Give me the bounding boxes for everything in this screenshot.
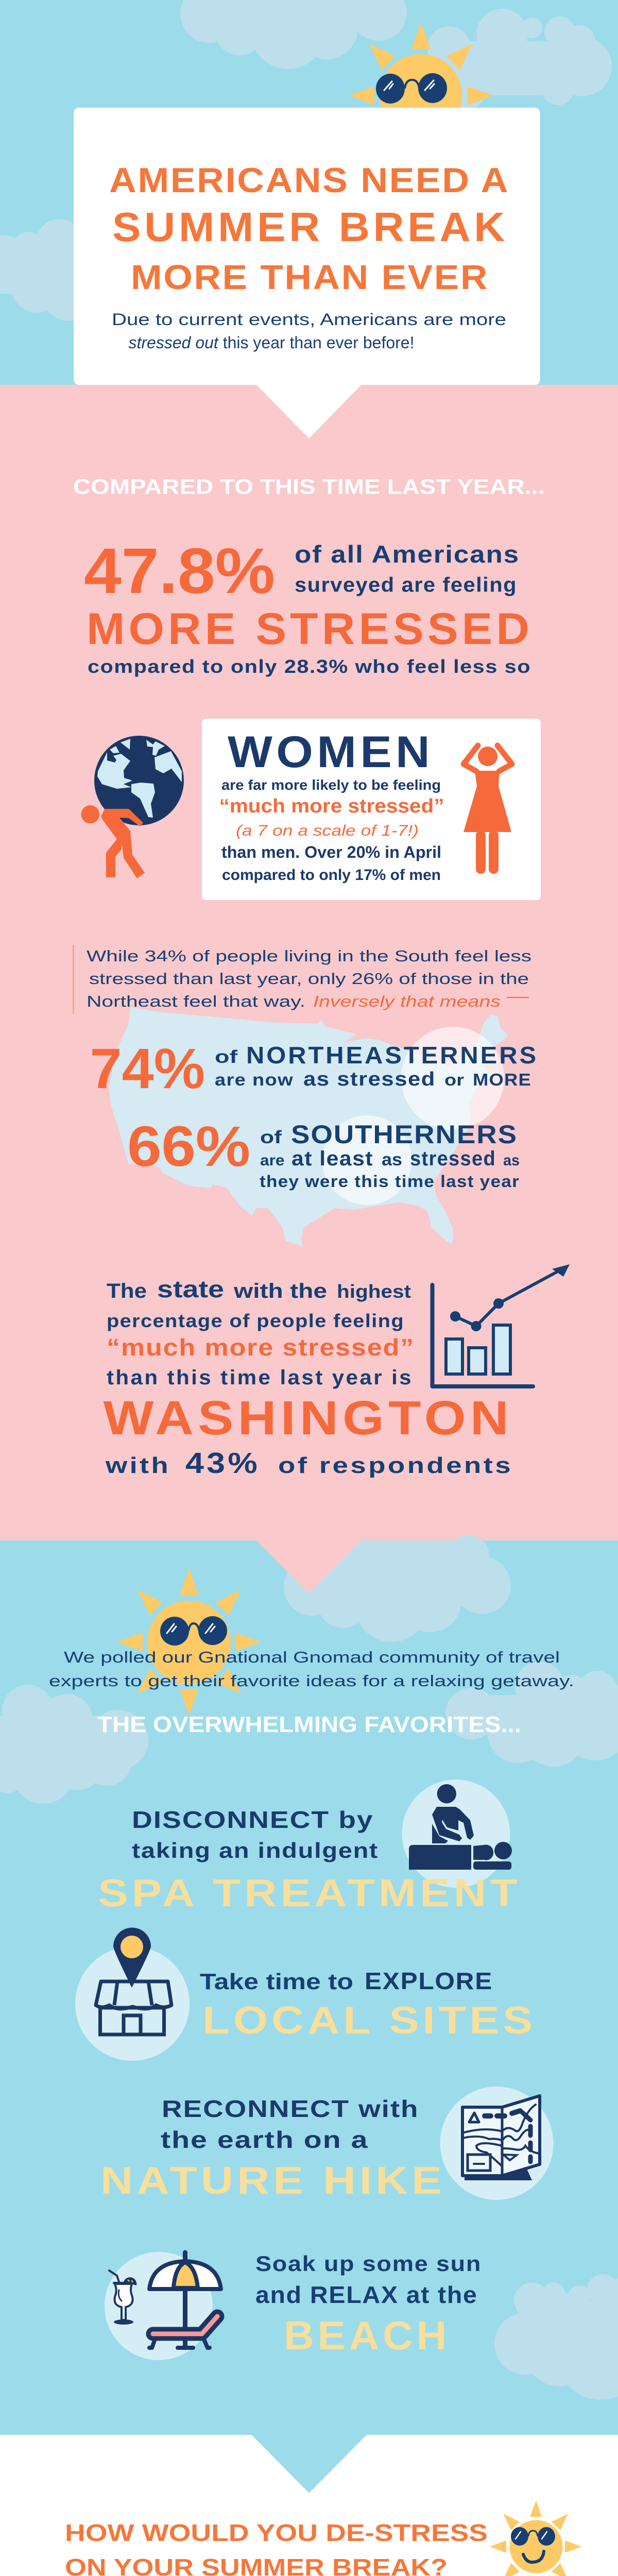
cloud: top right [427, 9, 612, 111]
stat: 74 percent of northeasterners: or [444, 1071, 464, 1089]
text: south versus northeast intro: Inversely that means [313, 992, 501, 1010]
text: with 43 percent of respondents: of respondents [278, 1453, 513, 1478]
heading: compared to this time last year: COMPARED TO THIS TIME LAST YEAR... [73, 475, 545, 499]
cloud: right of favorites heading [445, 1662, 618, 1767]
cloud: behind pink pointer [284, 1535, 511, 1642]
text: women callout body: than men. Over 20% in April [221, 843, 441, 861]
stat: 66 percent of southerners [127, 1115, 520, 1191]
stat: 74 percent of northeasterners [90, 1037, 538, 1100]
text: soak up some sun [255, 2251, 482, 2308]
subtitle: Due to current events, Americans are more [112, 310, 506, 329]
title: SUMMER BREAK [112, 204, 508, 250]
text: state with the highest percentage: The [107, 1280, 147, 1302]
text: with 43 percent of respondents [105, 1447, 513, 1480]
panel: sky favorites section [0, 1540, 618, 2435]
text: state with the highest percentage: than this time last year is [107, 1366, 413, 1389]
text: state with the highest percentage: percentage of people feeling [107, 1310, 404, 1331]
text: of all Americans surveyed [295, 540, 520, 597]
text: disconnect by taking an indulgent [132, 1806, 379, 1862]
icon: local business with pin [75, 1928, 190, 2061]
stat: 74 percent of northeasterners: MORE [473, 1070, 531, 1089]
map: United States silhouette [109, 1007, 508, 1247]
text: women callout body: are far more likely to be feeling [221, 777, 441, 793]
heading: beach: BEACH [284, 2313, 450, 2358]
text: soak up some sun: and RELAX at the [255, 2281, 478, 2308]
arrow: blue pointer [251, 2434, 367, 2493]
stat: 74 percent of northeasterners: are now [215, 1070, 294, 1089]
heading: women: WOMEN [228, 727, 434, 777]
stat: 74 percent of northeasterners: of [215, 1047, 237, 1067]
stat: 66 percent of southerners: of [260, 1127, 282, 1147]
stat: 66 percent of southerners: they were this time last year [260, 1172, 520, 1191]
stat: 66 percent of southerners: as [503, 1152, 520, 1169]
stat: 47.8 percent: 47.8% [84, 535, 275, 607]
icon: stressed woman [464, 745, 512, 874]
text: reconnect with the earth [161, 2095, 419, 2153]
text: south versus northeast intro: stressed than last year, only 26% of those in the [89, 970, 529, 988]
text: state with the highest percentage: with the [233, 1280, 327, 1302]
icon: spa massage [402, 1780, 512, 1888]
cloud: lower right beside beach [494, 2274, 618, 2400]
icon: smiling sun [490, 2501, 582, 2576]
heading: the overwhelming favorites: THE OVERWHELMING FAVORITES... [97, 1712, 521, 1737]
text: take time to explore: EXPLORE [365, 1968, 493, 1994]
text: we polled our community: We polled our Gnational Gnomad community of travel [64, 1648, 560, 1666]
panel: women callout [202, 719, 541, 900]
text: south versus northeast intro [73, 945, 531, 1014]
text: women callout body: “much more stressed” [219, 795, 444, 817]
heading: more stressed: MORE STRESSED [87, 604, 533, 654]
icon: beach lounger and cocktail [105, 2252, 221, 2360]
cloud: left of favorites heading [0, 1685, 148, 1804]
heading: spa treatment: SPA TREATMENT [98, 1871, 521, 1914]
heading: nature hike: NATURE HIKE [100, 2159, 445, 2202]
text: reconnect with the earth: RECONNECT with [162, 2095, 419, 2122]
title: MORE THAN EVER [131, 258, 489, 297]
text: take time to explore [200, 1968, 493, 1994]
text: state with the highest percentage: “much more stressed” [107, 1334, 415, 1361]
text: soak up some sun: Soak up some sun [255, 2251, 482, 2276]
text: women callout body [219, 777, 444, 884]
stat: 66 percent of southerners: are [260, 1152, 284, 1169]
stat: 66 percent of southerners: at least [291, 1147, 373, 1170]
arrow: pink pointer [256, 1540, 362, 1594]
stat: 66 percent of southerners: 66% [127, 1115, 250, 1178]
text: disconnect by taking an indulgent: taking an indulgent [132, 1838, 379, 1862]
cloud: top centre [180, 0, 407, 69]
text: of all Americans surveyed: of all Americans [295, 540, 520, 568]
text: state with the highest percentage [107, 1276, 415, 1389]
stat: 74 percent of northeasterners: 74% [90, 1037, 205, 1100]
text: disconnect by taking an indulgent: DISCONNECT by [132, 1806, 374, 1833]
icon: person carrying globe [81, 736, 184, 878]
subtitle: stressed out this year than ever before! [129, 333, 414, 352]
text: south versus northeast intro: Northeast feel that way. [87, 992, 305, 1010]
text: reconnect with the earth: the earth on a [161, 2126, 369, 2153]
cloud: left of card [0, 219, 96, 321]
subtitle [112, 310, 506, 352]
stat: 74 percent of northeasterners: NORTHEASTERNERS [246, 1042, 538, 1069]
icon: bar graph trend [433, 1264, 570, 1386]
heading: how would you de-stress: HOW WOULD YOU DE-STRESS [65, 2519, 488, 2546]
heading: local sites: LOCAL SITES [202, 1998, 536, 2042]
heading: how would you de-stress [65, 2519, 488, 2576]
text: we polled our community: experts to get their favorite ideas for a relaxing getaway. [49, 1672, 574, 1690]
text: state with the highest percentage: highest [337, 1281, 411, 1302]
text: with 43 percent of respondents: 43% [185, 1447, 260, 1480]
title: AMERICANS NEED A [109, 161, 509, 200]
panel: sky header background [0, 0, 618, 385]
icon: folded map [440, 2087, 553, 2200]
panel: pink stress section [0, 385, 618, 1540]
text: with 43 percent of respondents: with [105, 1453, 170, 1478]
title [109, 161, 509, 297]
text: women callout body: (a 7 on a scale of 1-7!) [236, 822, 419, 839]
text: take time to explore: Take time to [200, 1969, 353, 1994]
icon: sun peeking over card [349, 23, 493, 137]
stat: 74 percent of northeasterners: as stressed [303, 1069, 436, 1090]
panel: white call to action [0, 2435, 618, 2576]
heading: Washington: WASHINGTON [103, 1391, 513, 1445]
stat: 66 percent of southerners: as [382, 1150, 402, 1170]
stat: 66 percent of southerners: stressed [410, 1147, 496, 1170]
icon: sun with sunglasses [116, 1568, 261, 1715]
text: we polled our community [49, 1648, 574, 1690]
text: women callout body: compared to only 17% of men [222, 867, 441, 884]
text: south versus northeast intro: While 34% of people living in the South feel less [87, 947, 531, 965]
text: of all Americans surveyed: surveyed are feeling [295, 574, 517, 597]
text: state with the highest percentage: state [157, 1276, 224, 1302]
text: compared to only 28.3 percent: compared to only 28.3% who feel less so [88, 656, 531, 677]
panel: white title card [74, 108, 540, 438]
stat: 66 percent of southerners: SOUTHERNERS [291, 1120, 518, 1149]
